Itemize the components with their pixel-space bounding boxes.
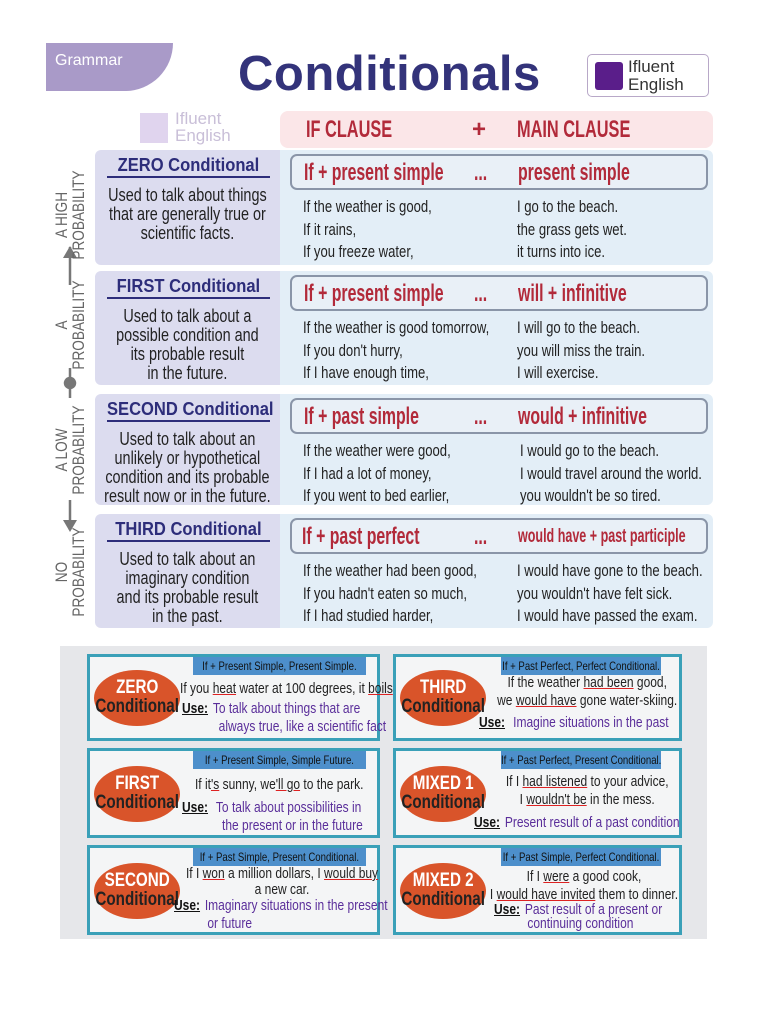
faded logo: [140, 109, 231, 145]
text: I would have passed the exam.: [517, 606, 697, 625]
card: mixed 1: MIXED 1: [413, 773, 474, 794]
card: mixed 1: Conditional: [401, 792, 485, 813]
probability axis: PROBABILITY: [69, 170, 88, 260]
card: zero: If you heat water at 100 degrees, it boils.: [180, 680, 396, 697]
card: second: Use: Imaginary situations in the present: [174, 897, 388, 914]
text: condition and its probable: [105, 467, 269, 487]
card: second: Conditional: [95, 889, 179, 910]
text: If I have enough time,: [303, 363, 429, 382]
text: ...: [474, 159, 487, 186]
text: ...: [474, 403, 487, 430]
card: first: Use: To talk about possibilities in: [182, 799, 361, 816]
probability axis: A LOW: [52, 428, 71, 472]
text: Used to talk about an: [119, 429, 255, 449]
text: If it rains,: [303, 220, 356, 238]
text: I will go to the beach.: [517, 318, 640, 337]
probability axis: PROBABILITY: [69, 405, 88, 495]
text: If I had studied harder,: [303, 606, 433, 625]
text: and its probable result: [117, 587, 258, 607]
logo: Ifluent: [628, 57, 674, 76]
card: mixed 1: Use: Present result of a past condition: [474, 814, 680, 831]
text: would + infinitive: [518, 403, 647, 430]
row: first: [95, 271, 713, 385]
card: second: If I won a million dollars, I would buy: [186, 865, 378, 882]
text: the grass gets wet.: [517, 220, 627, 238]
text: imaginary condition: [125, 568, 249, 588]
text: If + past perfect: [302, 523, 420, 550]
text: SECOND Conditional: [107, 399, 274, 419]
probability axis: [52, 170, 88, 617]
text: ...: [474, 280, 487, 307]
card: zero: If + Present Simple, Present Simple.: [202, 659, 357, 673]
grammar tab: [46, 43, 173, 91]
text: scientific facts.: [141, 223, 234, 243]
card: mixed 2: [393, 845, 682, 935]
card: first: [87, 748, 380, 838]
text: it turns into ice.: [517, 242, 605, 261]
text: If the weather had been good,: [303, 561, 477, 580]
faded logo: Ifluent: [175, 109, 221, 128]
text: I would go to the beach.: [520, 441, 659, 460]
text: ...: [474, 523, 487, 550]
text: If you don't hurry,: [303, 340, 403, 360]
text: Used to talk about an: [119, 549, 255, 569]
text: result now or in the future.: [104, 486, 271, 506]
card: mixed 2: Conditional: [401, 889, 485, 910]
card: zero: [87, 654, 380, 741]
text: If + past simple: [304, 403, 419, 430]
card: mixed 1: If I had listened to your advice,: [506, 773, 669, 790]
header: clauses: +: [472, 116, 486, 143]
text: possible condition and: [116, 325, 259, 345]
text: in the past.: [152, 606, 223, 626]
text: ZERO Conditional: [118, 155, 259, 175]
card: zero: Conditional: [95, 696, 179, 717]
card: mixed 2: If I were a good cook,: [527, 868, 641, 885]
text: in the future.: [147, 363, 227, 383]
text: Used to talk about things: [108, 185, 267, 205]
text: will + infinitive: [518, 280, 627, 307]
card: mixed 1: I wouldn't be in the mess.: [520, 791, 655, 808]
text: you will miss the train.: [517, 340, 645, 360]
card: mixed 2: continuing condition: [527, 915, 633, 932]
probability axis: NO: [52, 562, 71, 582]
grammar tab: Grammar: [55, 52, 123, 69]
text: you wouldn't be so tired.: [520, 486, 661, 505]
card: first: If it's sunny, we'll go to the park.: [195, 776, 363, 793]
card: third: If + Past Perfect, Perfect Conditional.: [502, 659, 660, 673]
card: third: we would have gone water-skiing.: [497, 692, 677, 709]
title: Conditionals: [238, 47, 541, 101]
card: zero: ZERO: [116, 677, 158, 698]
header: clauses: IF CLAUSE: [306, 116, 392, 143]
card: mixed 1: If + Past Perfect, Present Conditional.: [501, 753, 661, 767]
card: mixed 1: [393, 748, 682, 838]
card: mixed 2: If + Past Simple, Perfect Conditional.: [503, 850, 659, 864]
card: first: FIRST: [115, 773, 159, 794]
card: mixed 2: I would have invited them to dinner.: [490, 886, 678, 903]
probability axis: PROBABILITY: [69, 527, 88, 617]
faded logo: English: [175, 126, 231, 145]
text: would have + past participle: [518, 526, 686, 547]
text: If you freeze water,: [303, 242, 414, 261]
card: third: If the weather had been good,: [507, 674, 667, 691]
probability axis: A HIGH: [52, 192, 71, 238]
text: I will exercise.: [517, 363, 598, 382]
card: mixed 2: MIXED 2: [413, 870, 474, 891]
text: you wouldn't have felt sick.: [517, 584, 672, 602]
text: I would have gone to the beach.: [517, 561, 703, 580]
logo: [587, 54, 709, 97]
card: second: SECOND: [105, 870, 170, 891]
bottom panel: [60, 646, 707, 939]
text: unlikely or hypothetical: [115, 448, 260, 468]
card: second: [87, 845, 380, 935]
card: second: a new car.: [255, 881, 309, 898]
card: first: the present or in the future: [222, 817, 363, 834]
text: If the weather is good,: [303, 197, 432, 216]
row: zero: [95, 150, 713, 265]
text: I would travel around the world.: [520, 464, 702, 482]
text: Used to talk about a: [123, 306, 251, 326]
card: first: If + Present Simple, Simple Future.: [205, 753, 354, 767]
text: If you hadn't eaten so much,: [303, 584, 467, 602]
text: that are generally true or: [109, 204, 266, 224]
card: second: If + Past Simple, Present Conditional.: [200, 850, 359, 864]
text: present simple: [518, 159, 630, 186]
card: third: [393, 654, 682, 741]
probability axis: PROBABILITY: [69, 280, 88, 370]
card: zero: Use: To talk about things that are: [182, 700, 360, 717]
row: third: [95, 514, 713, 628]
card: third: Use: Imagine situations in the past: [479, 714, 669, 731]
card: first: Conditional: [95, 792, 179, 813]
header: clauses: [280, 111, 713, 148]
card: mixed 2: Use: Past result of a present or: [494, 901, 662, 918]
probability axis: A: [52, 320, 71, 330]
card: zero: always true, like a scientific fact: [219, 718, 386, 735]
text: THIRD Conditional: [115, 519, 262, 539]
text: If + present simple: [304, 280, 444, 307]
text: If + present simple: [304, 159, 444, 186]
text: I go to the beach.: [517, 197, 618, 216]
card: third: Conditional: [401, 696, 485, 717]
logo: English: [628, 75, 684, 94]
card: third: THIRD: [420, 677, 466, 698]
text: If you went to bed earlier,: [303, 486, 449, 505]
row: second: [95, 394, 713, 506]
card: second: or future: [207, 915, 252, 932]
text: If the weather is good tomorrow,: [303, 318, 489, 337]
text: FIRST Conditional: [117, 276, 260, 296]
text: its probable result: [131, 344, 244, 364]
text: If I had a lot of money,: [303, 464, 432, 482]
text: If the weather were good,: [303, 441, 451, 460]
header: clauses: MAIN CLAUSE: [517, 116, 630, 143]
